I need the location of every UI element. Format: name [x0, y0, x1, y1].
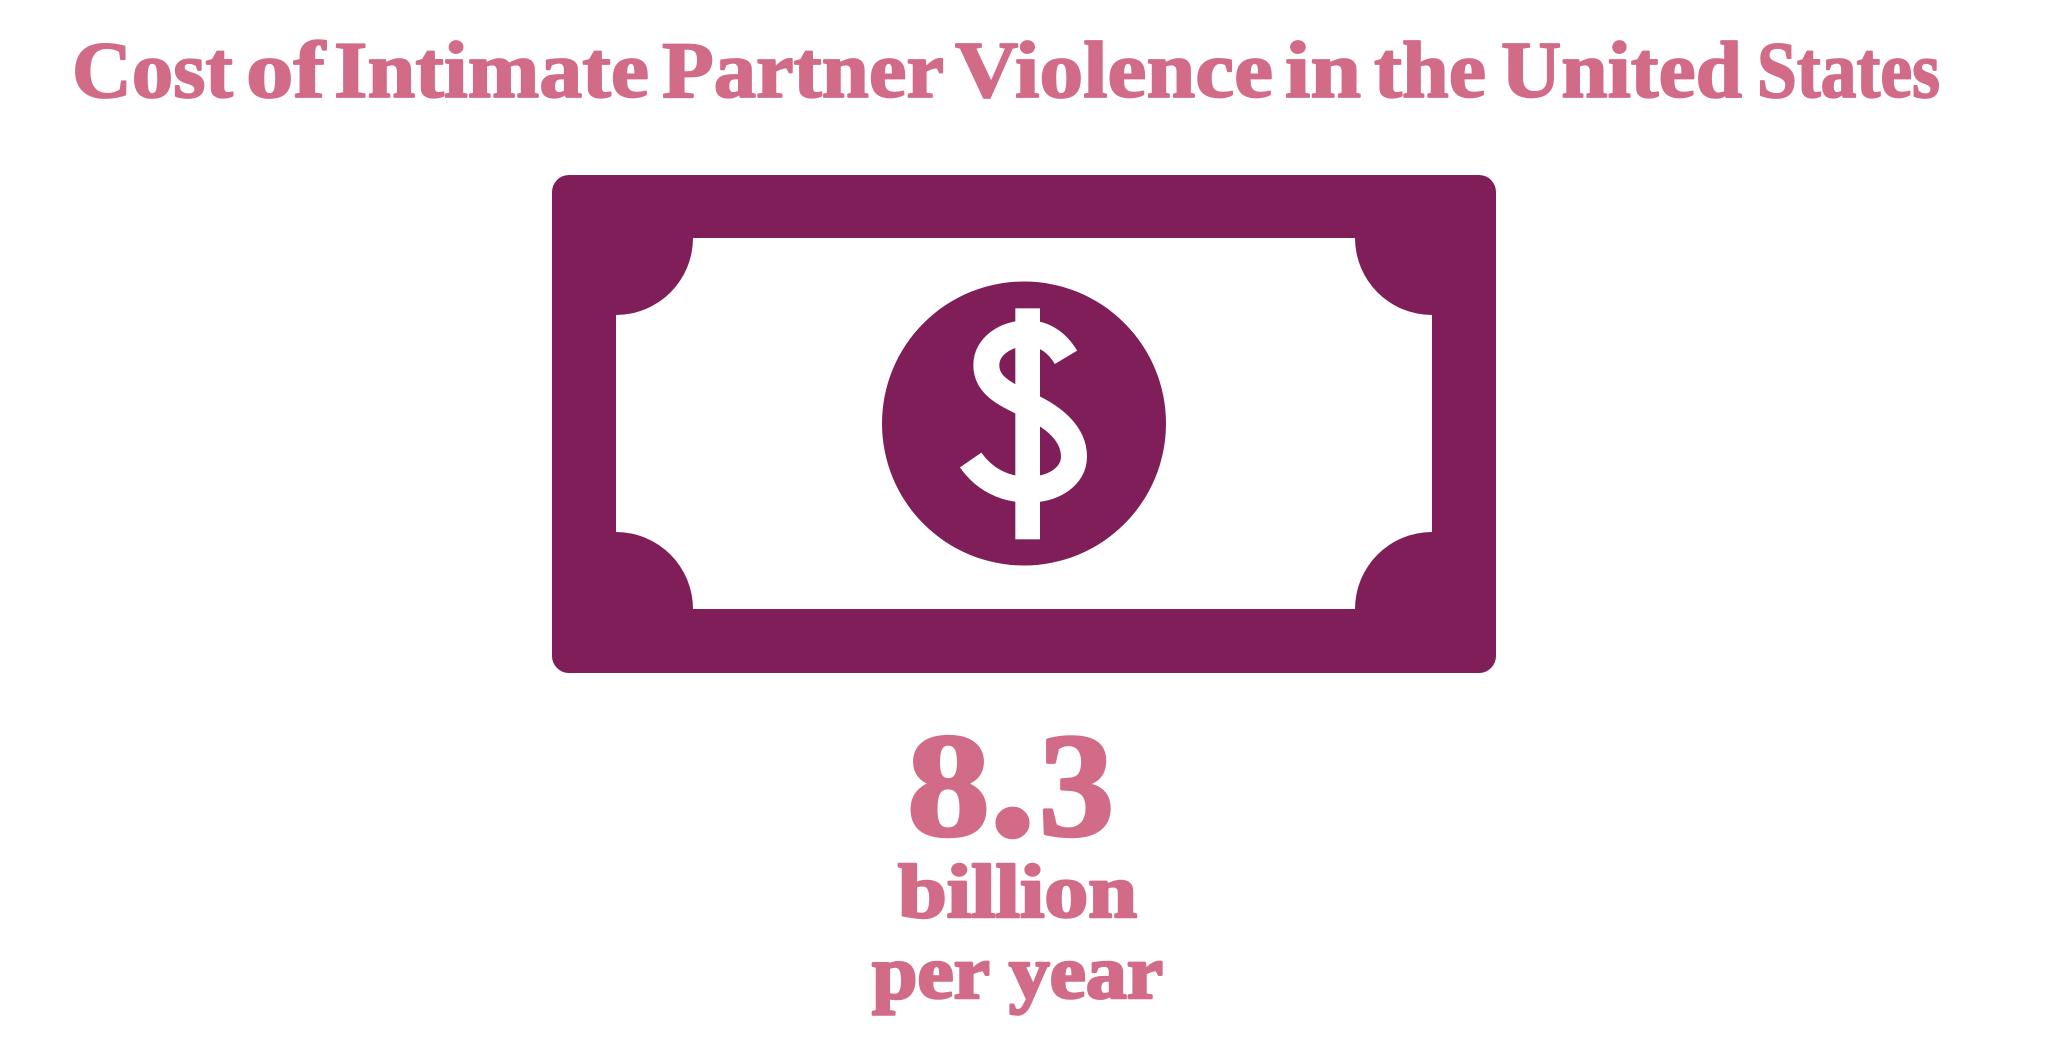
big number: . [989, 675, 1036, 874]
big number [907, 675, 1114, 874]
unit label: per year: per year [872, 931, 1163, 1015]
icon: dollar sign [971, 308, 1074, 539]
title: United [1501, 27, 1742, 115]
title: of [246, 27, 327, 115]
central coin [882, 282, 1166, 566]
title: Cost [72, 27, 233, 115]
big number: 8 [907, 704, 990, 868]
title: in [1285, 27, 1361, 115]
bill white inner panel with notched corners [616, 238, 1432, 609]
title: the [1374, 27, 1486, 115]
icon: dollar bill [552, 175, 1496, 673]
title: Intimate [334, 27, 649, 115]
unit label: billion: billion [898, 850, 1137, 934]
title [72, 27, 1940, 115]
title: States [1757, 27, 1940, 115]
title: Partner [662, 27, 944, 115]
big number: 3 [1039, 704, 1114, 868]
title: Violence [955, 27, 1273, 115]
bill outer body [552, 175, 1496, 673]
